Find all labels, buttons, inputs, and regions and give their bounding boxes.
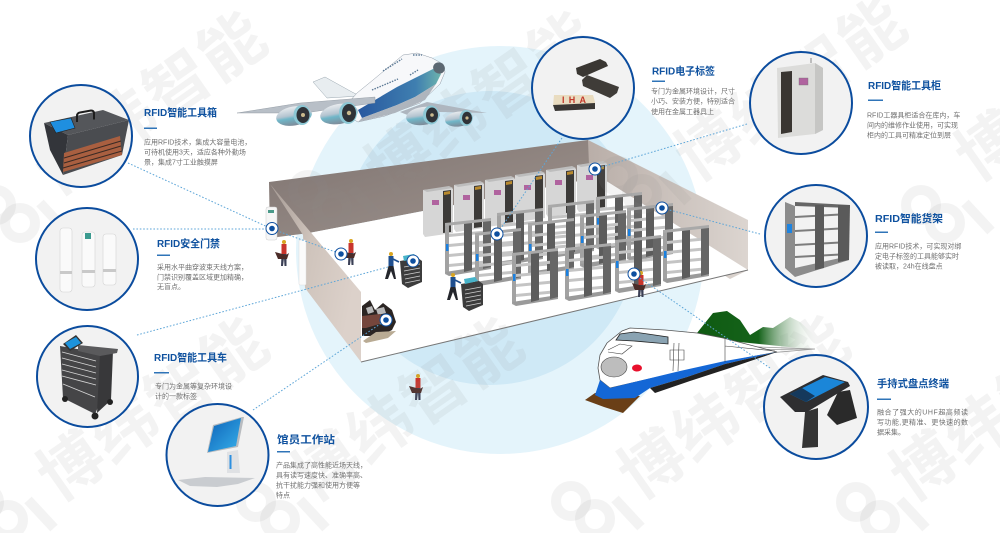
warehouse floor: [303, 177, 748, 362]
description: 应用RFID技术，集成大容量电池，: [144, 138, 251, 146]
panel: RFID智能工具柜: [750, 52, 960, 154]
circle: workstation: [166, 404, 268, 506]
warehouse scene: [266, 140, 748, 400]
ring: [30, 85, 132, 187]
icon: handheld terminal: [780, 375, 857, 448]
hotspot markers: [266, 163, 668, 326]
right wall: [588, 140, 748, 279]
description: 融合了强大的UHF超高频读: [877, 408, 968, 416]
underline: [868, 100, 883, 101]
underline: [877, 398, 891, 400]
window rows: [372, 55, 422, 90]
ring: [532, 37, 634, 139]
heading: RFID智能工具车: [154, 351, 227, 364]
ring: [765, 185, 867, 287]
description: [155, 382, 232, 400]
green hills: [697, 311, 820, 350]
icon: tool cart: [60, 335, 118, 420]
circle: tags: [532, 37, 634, 139]
description: [867, 110, 960, 140]
near wing: [237, 97, 375, 113]
heading: RFID智能工具柜: [868, 79, 941, 92]
heading: RFID安全门禁: [157, 237, 220, 250]
floor front edge: [361, 270, 748, 362]
description: 专门为金属环境设计，尺寸: [651, 86, 735, 96]
shelves: [445, 192, 709, 306]
circle: cart: [37, 326, 138, 427]
description: 据采集。: [877, 428, 905, 436]
description: 定电子标签的工具能够实时: [875, 252, 959, 260]
icon: workstation terminal: [178, 417, 255, 487]
description: 应用RFID技术，可实现对绑: [875, 242, 961, 250]
icon: RFID tags: [553, 59, 619, 111]
panel: RFID电子标签: [532, 37, 735, 139]
description: RFID工器具柜适合在库内，车: [867, 110, 960, 120]
background watermark text: 博纬智能: [280, 304, 537, 514]
train windows: [616, 332, 668, 344]
underline: [652, 80, 665, 82]
circle: gates: [36, 208, 138, 310]
panel: 手持式盘点终端: [764, 355, 968, 459]
description: 特点: [276, 490, 290, 500]
rail lines: [700, 345, 815, 355]
fuselage blue band: [358, 69, 441, 118]
left wall: [270, 184, 361, 362]
panel: RFID智能工具箱: [30, 85, 251, 187]
engine: far left: [275, 104, 313, 128]
panel: 馆员工作站: [166, 404, 367, 506]
dotted connector lines: [128, 124, 770, 410]
train body: [598, 328, 777, 388]
background watermark text: 博纬智能: [25, 304, 282, 514]
description: 景，集成7寸工业触摸屏: [144, 158, 218, 166]
door detail: [608, 338, 775, 371]
fuselage: [340, 53, 445, 122]
nose light: [601, 357, 627, 377]
icon: toolbox: [44, 110, 129, 175]
outer pale blue circle: [296, 46, 704, 454]
underline: [144, 128, 157, 129]
background watermark text: 博纬智能: [606, 302, 863, 512]
icon: shelf unit: [785, 202, 850, 277]
description: 写功能,更精准、更快速的数: [877, 418, 968, 426]
back wall: [269, 140, 600, 238]
security gates: [266, 207, 306, 285]
engine: near right: [405, 105, 441, 127]
train blue skirt: [595, 352, 777, 399]
heading: 馆员工作站: [277, 433, 336, 446]
icon: RFID tags: IHA: [562, 95, 586, 105]
description: 门禁识别覆盖区域更加精确，: [157, 272, 248, 282]
description: [877, 408, 968, 436]
engine: far right: [444, 110, 474, 128]
description: [875, 242, 961, 270]
heading: RFID智能货架: [875, 212, 944, 225]
background watermark text: 博纬智能: [23, 0, 280, 208]
description: 具有读写速度快、准确率高、: [276, 470, 367, 480]
background watermark text: 博纬智能: [353, 0, 610, 208]
description: [157, 262, 248, 291]
underline: [277, 451, 290, 452]
description: [144, 138, 251, 166]
red lamp: [632, 364, 642, 372]
description: 产品集成了高性能近场天线，: [276, 460, 367, 470]
description: 间内的维修作业使用，可实现: [867, 120, 958, 130]
ring: [764, 355, 868, 459]
panel: RFID安全门禁: [36, 208, 248, 310]
airplane illustration: [237, 53, 487, 128]
workstation desk: [362, 300, 396, 343]
description: [276, 460, 367, 500]
heading: RFID电子标签: [652, 64, 715, 78]
icon: gate panels: [60, 228, 116, 292]
tail fin: [313, 77, 360, 98]
workers and carts: [275, 239, 646, 400]
ring: [36, 208, 138, 310]
underline: [875, 232, 888, 233]
description: 抗干扰能力强和使用方便等: [276, 480, 360, 490]
bullet train illustration: [585, 328, 815, 413]
train underside shadow: [650, 352, 777, 393]
description: [651, 86, 735, 116]
description: 专门为金属等复杂环境设: [155, 382, 232, 390]
circle: shelf: [765, 185, 867, 287]
description: 可待机使用3天，适应各种外勤场: [144, 148, 246, 156]
underline: [157, 254, 170, 256]
far wing: [400, 102, 487, 116]
description: 采用水平曲穿波束天线方案，: [157, 262, 248, 272]
description: 计的一款标签: [155, 392, 197, 400]
tool cabinets row: [423, 161, 607, 237]
description: 无盲点。: [157, 282, 185, 291]
underline: [154, 372, 169, 374]
train base brown: [585, 393, 640, 413]
fuselage lower belly: [358, 84, 436, 122]
panel: RFID智能工具车: [37, 326, 232, 427]
heading: RFID智能工具箱: [144, 106, 217, 119]
ring: [37, 326, 138, 427]
description: 柜内的工具可精准定位到层: [867, 130, 951, 140]
circle: toolbox: [30, 85, 132, 187]
description: 使用在金属工器具上: [651, 107, 714, 116]
ring: [166, 404, 268, 506]
circle: terminal: [764, 355, 868, 459]
panel: RFID智能货架: [765, 185, 961, 287]
nose tip: [431, 60, 447, 76]
inner blue circle: [343, 91, 637, 385]
ring: [750, 52, 852, 154]
description: 被读取，24h在线盘点: [875, 262, 943, 270]
engine: near left: [319, 101, 359, 127]
icon: tool cabinet: [777, 58, 823, 138]
heading: 手持式盘点终端: [877, 377, 949, 390]
description: 小巧、安装方便，特别适合: [651, 96, 735, 106]
circle: cabinet: [750, 52, 852, 154]
